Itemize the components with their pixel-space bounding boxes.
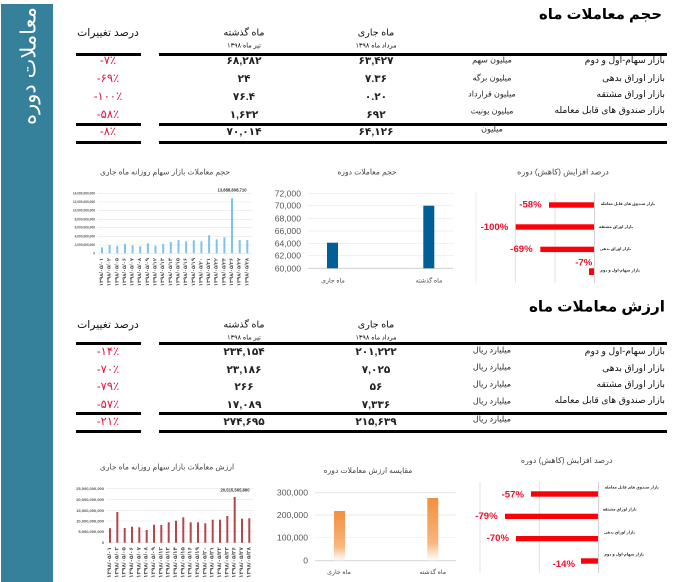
current month column (355, 346, 397, 428)
chart: period percent change in value: بازار صندوق های قابل معامله (605, 486, 660, 490)
market labels column: بازار اوراق بدهی (602, 363, 665, 373)
chart: daily stock market volume: ۱۳۹۸/۰۵/۱۳ (160, 257, 166, 286)
chart: daily stock market value: ۱۳۹۸/۰۵/۲۰ (201, 547, 208, 578)
chart: period trading volume: 68,000 (275, 213, 301, 223)
percent change column: -۲۱٪ (97, 416, 119, 428)
chart: daily stock market volume: ۱۳۹۸/۰۵/۲۸ (244, 257, 250, 286)
chart: period percent change in volume: -69% (510, 244, 533, 255)
percent change column: -۷۹٪ (97, 381, 119, 393)
chart: daily stock market value: ۱۳۹۸/۰۵/۲۷ (238, 546, 245, 578)
chart: period percent change in volume: بازار اوراق بدهی (600, 247, 632, 251)
chart: period percent change in volume: -58% (519, 200, 542, 210)
chart: daily stock market value: ۱۳۹۸/۰۵/۲۶ (231, 547, 238, 578)
chart: period percent change in volume: -7% (575, 258, 593, 268)
units column: میلیون برگه (473, 72, 511, 82)
chart: daily stock market volume: 4,000,000,000 (75, 234, 95, 238)
previous month column: ۱۷,۰۸۹ (227, 399, 262, 411)
column headers: درصد تغییرات (77, 27, 139, 39)
percent change column: -۷٪ (100, 55, 116, 67)
chart: daily stock market volume: 0 (93, 251, 95, 255)
units column: میلیون سهم (472, 56, 512, 64)
chart: period trading volume: 60,000 (275, 263, 301, 273)
chart: period trading value comparison (277, 466, 456, 576)
units column: میلیارد ریال (473, 414, 511, 424)
chart: daily stock market volume: ۱۳۹۸/۰۵/۱۶ (183, 258, 189, 286)
chart: daily stock market volume: ۱۳۹۸/۰۵/۰۱ (99, 258, 105, 286)
chart: period percent change in value: -57% (502, 490, 524, 500)
chart: daily stock market value: 20,515,565,860 (220, 488, 250, 492)
chart: daily stock market value: ۱۳۹۸/۰۵/۱۹ (194, 546, 201, 578)
chart: daily stock market volume: ۱۳۹۸/۰۵/۱۹ (191, 257, 197, 286)
current month column (359, 55, 394, 138)
percent change column (94, 55, 122, 138)
chart: daily stock market volume: ۱۳۹۸/۰۵/۰۷ (130, 257, 136, 286)
chart: period percent change in value (475, 456, 660, 573)
current month column: ۰.۲۰ (365, 91, 387, 103)
units column: میلیون قرارداد (468, 90, 516, 98)
percent change column: -۷۰٪ (97, 364, 119, 376)
chart: daily stock market value: ۱۳۹۸/۰۵/۱۲ (157, 546, 164, 578)
chart: period percent change in volume: بازار صندوق های قابل معامله (601, 202, 656, 206)
chart: daily stock market volume: ۱۳۹۸/۰۵/۲۷ (237, 257, 243, 286)
previous month column: ۷۶.۴ (233, 91, 256, 103)
percent change column (97, 346, 119, 428)
sidebar: period trades (1, 4, 53, 582)
chart: daily stock market value: 10,000,000,000 (76, 518, 105, 524)
chart: daily stock market value: 20,000,000,000 (76, 497, 105, 502)
chart: daily stock market volume: ۱۳۹۸/۰۵/۰۹ (145, 257, 151, 286)
percent change column: -۵۸٪ (97, 109, 119, 121)
chart: daily stock market value: ۱۳۹۸/۰۵/۰۷ (135, 546, 142, 578)
percent change column: -۵۷٪ (97, 399, 119, 411)
chart: period trading volume: 62,000 (275, 251, 301, 261)
chart: period percent change in value: درصد افزایش (کاهش) دوره (521, 456, 613, 465)
chart: daily stock market value: ۱۳۹۸/۰۵/۲۲ (216, 546, 223, 578)
chart: daily stock market volume: ۱۳۹۸/۰۵/۲۶ (229, 258, 235, 286)
chart: period trading value comparison: 300,000 (277, 488, 308, 498)
previous month column: ۲۳۴,۱۵۴ (223, 346, 265, 358)
chart: daily stock market volume: ۱۳۹۸/۰۵/۲۳ (221, 257, 227, 286)
chart: period trading volume: 64,000 (275, 238, 301, 248)
chart: period percent change in volume: درصد افزایش (کاهش) دوره (517, 168, 609, 176)
chart: daily stock market value: ارزش معاملات بازار سهام روزانه ماه جاری (100, 462, 234, 472)
column headers: مرداد ماه ۱۳۹۸ (355, 42, 397, 50)
chart: period percent change in value: بازار اوراق مشتقه (603, 507, 637, 511)
chart: period trading volume: ماه گذشته (416, 276, 442, 284)
chart: daily stock market value: ۱۳۹۸/۰۵/۰۹ (150, 546, 157, 578)
units column: میلیارد ریال (473, 396, 511, 406)
chart: daily stock market volume: ۱۳۹۸/۰۵/۲۰ (198, 258, 204, 286)
units column: میلیون (481, 124, 503, 134)
current month column: ۶۳,۴۲۷ (359, 55, 394, 67)
chart: daily stock market value: ۱۳۹۸/۰۵/۲۸ (245, 546, 252, 578)
percent change column: -۸٪ (100, 126, 116, 138)
column headers: ماه جاری (358, 320, 394, 330)
units column (473, 346, 511, 424)
current month column: ۷.۳۶ (365, 73, 387, 85)
column headers (77, 318, 397, 342)
chart: daily stock market volume: ۱۳۹۸/۰۵/۰۵ (114, 257, 120, 286)
market labels column (554, 55, 665, 115)
column headers: درصد تغییرات (77, 319, 139, 331)
market labels column: بازار صندوق های قابل معامله (554, 105, 665, 115)
heading: monthly trading value: ارزش معاملات ماه (529, 298, 665, 316)
column headers: ماه گذشته (223, 318, 265, 330)
current month column: ۷,۰۲۵ (362, 364, 391, 376)
previous month column: ۲۳,۱۸۶ (227, 364, 261, 376)
previous month column: ۲۷۴,۶۹۵ (223, 416, 265, 428)
chart: daily stock market value: 15,000,000,000 (76, 508, 105, 513)
percent change column: -۱۰۰٪ (94, 91, 122, 103)
column headers: تیر ماه ۱۳۹۸ (227, 42, 261, 50)
units column (468, 56, 516, 134)
chart: period trading value comparison: 0 (303, 556, 308, 566)
sidebar: period trades: معاملات دوره (18, 7, 40, 125)
chart: period trading value comparison: 100,000 (277, 533, 308, 543)
chart: period trading value comparison: 200,000 (277, 510, 308, 520)
heading: monthly trading volume: حجم معاملات ماه (539, 7, 662, 23)
units column: میلیارد ریال (473, 362, 511, 372)
chart: daily stock market value: ۱۳۹۸/۰۵/۱۴ (172, 546, 179, 578)
market labels column: بازار اوراق مشتقه (597, 89, 665, 99)
current month column: ۷,۳۳۶ (362, 399, 390, 411)
column headers: مرداد ماه ۱۳۹۸ (355, 334, 397, 342)
chart: period trading volume: 70,000 (275, 201, 301, 211)
chart: period percent change in volume: بازار اوراق مشتقه (599, 225, 634, 229)
previous month column (227, 55, 262, 138)
chart: period trading volume: 66,000 (275, 226, 301, 236)
chart: daily stock market value: ۱۳۹۸/۰۵/۰۵ (121, 546, 128, 578)
current month column: ۵۶ (370, 381, 382, 393)
chart: daily stock market value: ۱۳۹۸/۰۵/۲۳ (223, 546, 230, 578)
chart: daily stock market value: ۱۳۹۸/۰۵/۱۳ (165, 546, 172, 578)
chart: daily stock market volume: ۱۳۹۸/۰۵/۲۲ (214, 257, 220, 286)
chart: daily stock market value: ۱۳۹۸/۰۵/۰۲ (113, 546, 120, 578)
chart: daily stock market volume: حجم معاملات بازار سهام روزانه ماه جاری (100, 168, 230, 176)
chart: daily stock market value: 25,000,000,000 (76, 486, 105, 491)
units column: میلیون یونیت (471, 106, 513, 116)
column headers: تیر ماه ۱۳۹۸ (227, 334, 261, 342)
chart: daily stock market value: ۱۳۹۸/۰۵/۰۸ (143, 546, 150, 578)
previous month column: ۶۸,۲۸۲ (227, 55, 262, 67)
units column: میلیارد ریال (473, 380, 511, 388)
column headers: ماه گذشته (223, 26, 265, 38)
current month column: ۲۰۱,۲۲۲ (355, 346, 397, 358)
previous month column: ۷۰,۰۱۴ (227, 126, 262, 138)
previous month column (223, 346, 265, 428)
market labels column: بازار اوراق بدهی (602, 73, 665, 83)
chart: period percent change in value: بازار اوراق بدهی (604, 531, 636, 535)
market labels column: بازار صندوق های قابل معامله (554, 395, 665, 405)
market labels column: بازار اوراق مشتقه (597, 379, 665, 389)
chart: daily stock market volume: 2,000,000,000 (75, 243, 95, 247)
chart: daily stock market volume: ۱۳۹۸/۰۵/۱۲ (152, 257, 158, 286)
current month column: ۲۱۵,۶۳۹ (355, 416, 397, 428)
chart: daily stock market value (76, 462, 254, 578)
market labels column: بازار سهام-اول و دوم (585, 55, 665, 65)
chart: daily stock market value: ۱۳۹۸/۰۵/۱۶ (187, 547, 194, 578)
chart: daily stock market volume: 14,000,000,000 (73, 191, 95, 195)
chart: daily stock market volume: ۱۳۹۸/۰۵/۰۸ (137, 257, 143, 286)
chart: period trading volume (275, 168, 453, 284)
chart: period percent change in value: بازار سهام-اول و دوم (604, 553, 645, 557)
chart: daily stock market value: ۱۳۹۸/۰۵/۰۶ (128, 547, 135, 578)
chart: daily stock market volume: ۱۳۹۸/۰۵/۰۶ (122, 258, 128, 286)
chart: daily stock market volume: 8,000,000,000 (75, 217, 95, 221)
previous month column: ۱,۶۳۲ (230, 109, 259, 121)
chart: daily stock market volume: ۱۳۹۸/۰۵/۱۴ (168, 258, 174, 286)
chart: period trading volume: ماه جاری (321, 278, 345, 284)
chart: daily stock market volume: 13,888,808,710 (217, 188, 247, 192)
chart: daily stock market value: ۱۳۹۸/۰۵/۲۱ (209, 547, 216, 578)
chart: daily stock market value: ۱۳۹۸/۰۵/۱۵ (179, 546, 186, 578)
chart: period percent change in value: -79% (475, 511, 498, 522)
chart: period percent change in volume: بازار سهام-اول و دوم (600, 269, 641, 273)
chart: daily stock market value: 0 (102, 540, 105, 545)
chart: period percent change in value: -70% (487, 533, 509, 544)
chart: period percent change in value: -14% (553, 559, 575, 570)
chart: daily stock market value: 5,000,000,000 (78, 529, 105, 534)
chart: period trading value comparison: مقایسه ارزش معاملات دوره (324, 466, 412, 475)
chart: daily stock market volume: 12,000,000,000 (73, 200, 95, 204)
table: monthly trading value (76, 318, 667, 433)
chart: daily stock market volume: 10,000,000,000 (73, 209, 95, 213)
chart: period trading value comparison: ماه جاری (327, 569, 351, 576)
market labels column (554, 346, 665, 405)
chart: daily stock market volume: ۱۳۹۸/۰۵/۰۲ (107, 257, 113, 286)
chart: daily stock market volume (73, 168, 252, 286)
chart: daily stock market volume: ۱۳۹۸/۰۵/۲۱ (206, 258, 212, 286)
previous month column: ۲۴ (238, 73, 251, 85)
chart: period trading volume: 72,000 (275, 188, 301, 198)
percent change column: -۶۹٪ (97, 73, 119, 85)
column headers (77, 26, 397, 50)
units column: میلیارد ریال (473, 346, 511, 354)
current month column: ۶۴,۱۲۶ (359, 126, 393, 138)
chart: period trading value comparison: ماه گذشته (419, 568, 446, 576)
chart: period trading volume: حجم معاملات دوره (337, 168, 397, 176)
column headers: ماه جاری (358, 28, 394, 38)
chart: daily stock market volume: ۱۳۹۸/۰۵/۱۵ (176, 257, 182, 286)
chart: daily stock market value: ۱۳۹۸/۰۵/۰۱ (106, 547, 113, 578)
chart: daily stock market volume: 6,000,000,000 (75, 226, 95, 230)
chart: period percent change in volume (476, 168, 656, 283)
market labels column: بازار سهام-اول و دوم (585, 346, 665, 356)
previous month column: ۲۶۶ (234, 381, 254, 393)
chart: period percent change in volume: -100% (481, 222, 509, 233)
current month column: ۶۹۲ (366, 109, 386, 121)
table: monthly trading volume (76, 26, 667, 144)
percent change column: -۱۴٪ (97, 346, 119, 358)
